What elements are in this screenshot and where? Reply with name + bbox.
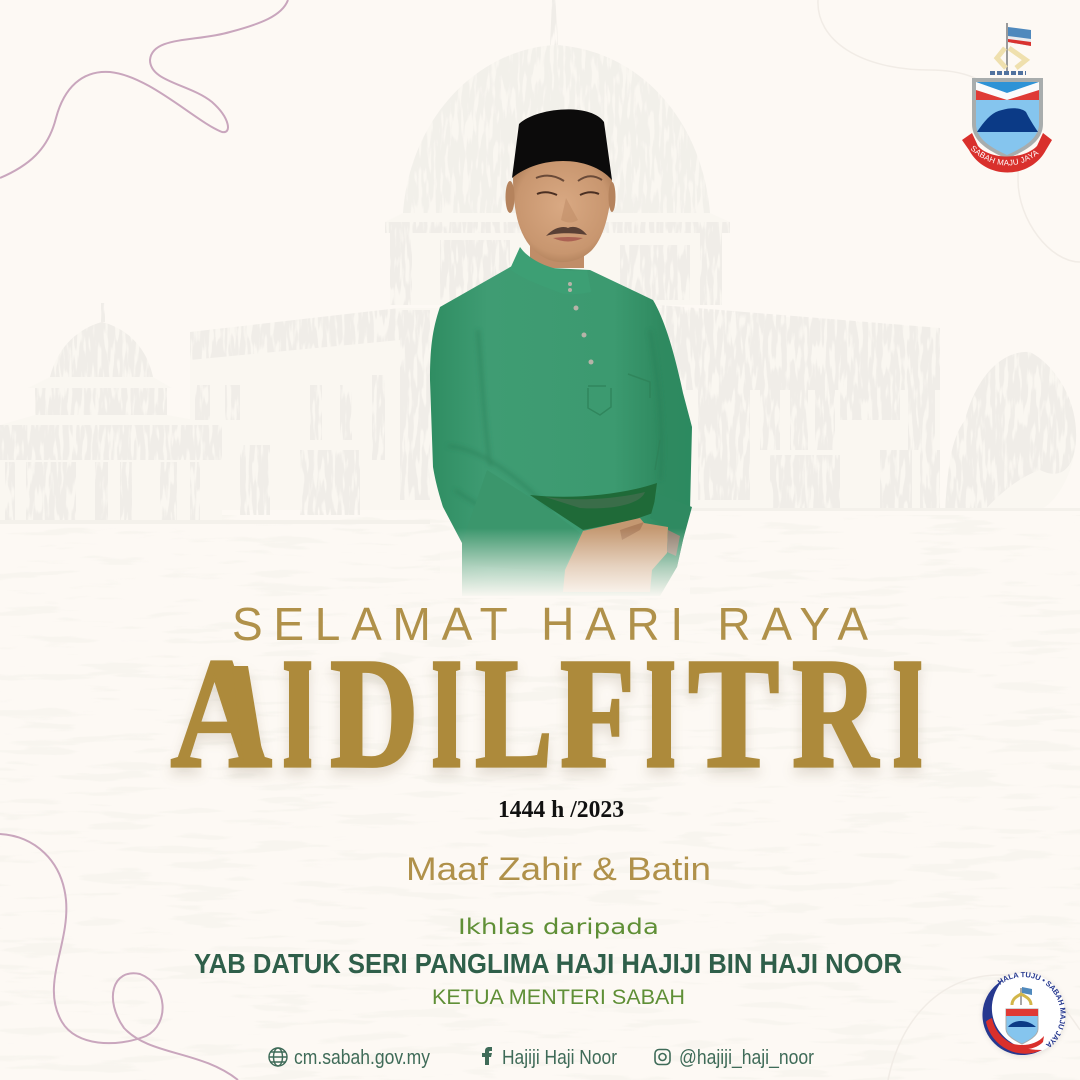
torso and sleeves — [430, 266, 692, 596]
background illustration: mosque — [0, 0, 1080, 524]
heading: aidilfitri: R — [792, 627, 880, 801]
mosque base tone — [0, 45, 1076, 522]
left cuff — [462, 470, 580, 572]
badge: hala tuju sabah maju jaya: HALA TUJU • SABAH MAJU JAYA — [998, 972, 1066, 1048]
sender title: KETUA MENTERI SABAH — [432, 985, 685, 1009]
collar — [510, 247, 591, 294]
heading: aidilfitri: A — [171, 626, 272, 801]
sash — [530, 483, 657, 530]
sender name: YAB DATUK SERI PANGLIMA HAJI HAJIJI BIN HAJI NOOR — [194, 948, 902, 979]
state crest: SABAH MAJU JAYA — [970, 146, 1039, 166]
mosque engraving hatch — [0, 0, 1076, 520]
footer: instagram: @hajiji_haji_noor — [679, 1047, 814, 1069]
hands — [563, 518, 668, 592]
heading: aidilfitri: I — [431, 627, 462, 801]
sender label: Ikhlas daripada — [458, 915, 659, 939]
icon: globe — [269, 1048, 287, 1066]
sleeve folds and pocket — [448, 330, 662, 521]
greeting: Maaf Zahir & Batin — [406, 851, 711, 887]
heading: aidilfitri: F — [560, 625, 635, 801]
ground line — [0, 508, 1080, 524]
icon: facebook — [482, 1047, 492, 1065]
decorative curve: bottom right — [888, 975, 1080, 1080]
portrait fade — [440, 528, 690, 598]
date: 1444 h /2023 — [498, 797, 624, 823]
state crest — [962, 23, 1052, 172]
heading: aidilfitri: D — [330, 625, 418, 801]
face — [513, 160, 612, 262]
neck — [530, 240, 584, 268]
right cuff — [650, 493, 692, 585]
decorative curve: top left — [0, 0, 288, 178]
decorative curve: bottom left — [0, 834, 238, 1080]
heading: aidilfitri: L — [475, 626, 553, 800]
heading: selamat hari raya: SELAMAT HARI RAYA — [232, 598, 868, 650]
heading: aidilfitri: I — [282, 627, 313, 801]
heading: aidilfitri: I — [892, 627, 923, 801]
buttons — [568, 282, 594, 364]
heading: aidilfitri: I — [645, 627, 676, 801]
watch — [667, 530, 680, 556]
facial features — [536, 176, 602, 181]
footer: facebook: Hajiji Haji Noor — [502, 1047, 617, 1069]
songkok — [512, 109, 612, 180]
ground texture — [0, 515, 1080, 1080]
heading: aidilfitri — [171, 625, 923, 801]
decorative curve: top right — [818, 0, 1080, 262]
icon: instagram — [655, 1050, 670, 1064]
footer: website: cm.sabah.gov.my — [294, 1047, 430, 1069]
portrait: man in green baju melayu — [430, 109, 692, 596]
heading: aidilfitri: T — [688, 625, 779, 800]
letter stems: thickened to match heavy display face — [232, 662, 918, 763]
